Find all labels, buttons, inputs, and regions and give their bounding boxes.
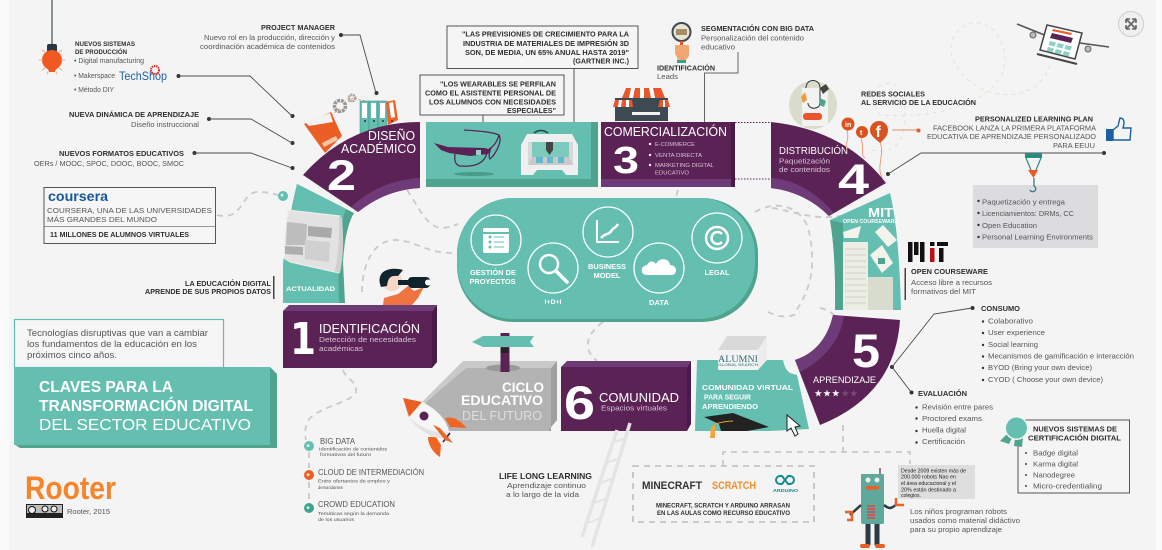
sector 6: comunidad <box>561 361 691 431</box>
sector 3: comercialización: COMERCIALIZACIÓN <box>604 124 727 139</box>
list: consumo: User experience <box>988 328 1045 337</box>
cloud item <box>304 467 424 491</box>
list: consumo: BYOD (Bring your own device) <box>988 363 1093 372</box>
logo: MIT <box>908 242 948 262</box>
sector 6: comunidad: COMUNIDAD <box>599 390 679 405</box>
text block: life long learning <box>499 471 592 499</box>
panel: coursera: 11 MILLONES DE ALUMNOS VIRTUALES <box>50 230 189 239</box>
panel: games in classrooms: MINECRAFT, SCRATCH Y ARDUINO ARRASAN <box>656 504 790 510</box>
text block: redes sociales: REDES SOCIALES <box>861 92 925 98</box>
panel: ciclo educativo del futuro: DEL FUTURO <box>462 408 542 423</box>
sector 5: aprendizaje: 5 <box>852 324 880 377</box>
panel: paquetización list: Licenciamientos: DRMs, CC <box>982 209 1075 218</box>
list: evaluación <box>915 389 993 446</box>
icon: paper stack <box>843 225 897 310</box>
sector 6: comunidad: 6 <box>564 376 595 429</box>
callout: wearables: COMO EL ASISTENTE PERSONAL DE <box>425 90 556 98</box>
icon: magnifier and hand <box>672 23 690 63</box>
connectors: quotes to panel <box>483 68 574 122</box>
icon: gestión de proyectos <box>470 215 521 286</box>
central panel: capabilities <box>457 198 758 322</box>
button: expand <box>1118 12 1144 36</box>
panel: comunidad virtual <box>695 360 809 438</box>
text block: segmentación con big data: educativo <box>701 42 735 52</box>
dashed link: coursera to actualidad <box>217 191 288 216</box>
icon: thumbs up <box>1106 118 1131 141</box>
text block: nuevos sistemas de producción: • Método DIY <box>74 87 114 94</box>
sector 1: identificación <box>283 305 437 368</box>
callout: previsiones de crecimiento: SON, DE MEDIA, UN 65% ANUAL HASTA 2019" <box>465 50 629 57</box>
sector 2: diseño académico <box>303 122 420 212</box>
callout: previsiones de crecimiento <box>447 26 638 68</box>
panel: MIT open courseware: MIT <box>868 205 893 220</box>
text block: open courseware: Acceso libre a recursos <box>911 278 992 287</box>
text block: identificación leads: IDENTIFICACIÓN <box>657 64 715 72</box>
list: evaluación: EVALUACIÓN <box>918 389 967 398</box>
text box: introducción: Tecnologías disruptivas que van a cambiar <box>27 328 208 339</box>
icon: ladder <box>582 423 630 547</box>
text block: segmentación con big data: Personalización del contenido <box>701 34 804 42</box>
panel: ciclo educativo del futuro: CICLO <box>502 380 544 395</box>
icon: legal copyright: LEGAL <box>704 270 730 277</box>
connectors: aprendizaje <box>890 306 974 394</box>
sector 1: identificación: Detección de necesidades <box>319 335 416 344</box>
text block: project manager <box>200 23 336 51</box>
logo: TechShop: TechShop <box>119 69 167 83</box>
sector 4: distribución: Paquetización <box>779 156 830 166</box>
icon: I+D+I <box>528 243 578 306</box>
connector: nuevos sistemas <box>176 74 294 118</box>
text block: nuevos formatos educativos <box>34 149 185 168</box>
panel: MIT open courseware <box>830 193 901 310</box>
connector: personalized learning plan <box>886 151 1106 176</box>
cloud item: * <box>306 472 310 481</box>
panel: certificación digital: Karma digital <box>1033 460 1078 468</box>
connector: redes sociales <box>892 128 920 132</box>
panel: certificación digital: CERTIFICACIÓN DIGITAL <box>1028 434 1121 442</box>
connector: nuevos formatos <box>192 151 294 170</box>
text block: nueva dinámica de aprendizaje <box>69 110 199 129</box>
logo: Rooter: Rooter <box>25 470 116 506</box>
sector 4: distribución: 4 <box>838 156 869 204</box>
icon: badge <box>1000 416 1028 447</box>
panel: paquetización list: Personal Learning Environments <box>982 232 1093 242</box>
text box: introducción: los fundamentos de la educación en los <box>27 339 197 350</box>
icon: crane hook <box>1025 153 1042 192</box>
panel: coursera: coursera <box>48 188 108 204</box>
panel: games in classrooms <box>633 466 814 522</box>
list: evaluación: Revisión entre pares <box>922 402 993 412</box>
cloud item: Entre ofertantes de empleo y <box>318 478 391 484</box>
text block: educación digital: LA EDUCACIÓN DIGITAL <box>185 279 272 288</box>
crowd item: Temáticas según la demanda <box>318 511 389 517</box>
note: robots Nao <box>898 465 975 499</box>
icon: store <box>613 88 670 121</box>
icon: data cloud <box>634 243 684 307</box>
text block: open courseware <box>904 268 992 300</box>
sector 1: identificación: IDENTIFICACIÓN <box>319 321 420 336</box>
sector 2: diseño académico: DISEÑO <box>368 128 415 143</box>
sector 1: identificación: 1 <box>290 314 316 365</box>
callout: previsiones de crecimiento: INDUSTRIA DE MATERIALES DE IMPRESIÓN 3D <box>463 39 629 48</box>
panel: certificación digital: Badge digital <box>1033 448 1078 458</box>
title <box>14 367 277 448</box>
sector 1: identificación: académicas <box>319 344 363 353</box>
text block: robots caption: usados como material didáctivo <box>910 516 1020 525</box>
panel: comunidad virtual: PARA SEGUIR <box>704 392 752 402</box>
list: future trends <box>304 436 424 523</box>
callout: previsiones de crecimiento: (GARTNER INC.) <box>573 58 629 66</box>
cloud item: demandantes <box>318 485 344 491</box>
panel: coursera <box>44 188 216 244</box>
list: consumo: CYOD ( Choose your own device) <box>988 375 1104 384</box>
icon: graduation cap <box>704 413 769 438</box>
text box: introducción: próximos cinco años. <box>27 350 117 361</box>
text block: segmentación con big data: SEGMENTACIÓN CON BIG DATA <box>701 24 815 33</box>
panel: certificación digital: Micro-credentialing <box>1033 482 1102 490</box>
icon: signpost <box>472 333 534 372</box>
sector 3: comercialización: EDUCATIVO <box>655 170 690 176</box>
sector 4: distribución <box>771 122 886 216</box>
text block: segmentación con big data <box>701 24 815 52</box>
text block: personalized learning plan: PARA EEUU <box>1053 143 1095 150</box>
logo: Rooter <box>25 470 116 518</box>
text block: nuevos sistemas de producción: • Digital manufacturing <box>74 58 144 65</box>
text block: educación digital <box>145 276 274 299</box>
text block: nuevos sistemas de producción: NUEVOS SISTEMAS <box>75 41 136 48</box>
panel: coursera: COURSERA, UNA DE LAS UNIVERSIDADES <box>47 206 212 215</box>
sector 6: comunidad: Espacios virtuales <box>601 404 667 412</box>
icon: social balloons: in <box>845 122 851 129</box>
dashed link: coursera to actualidad: * <box>280 192 284 202</box>
big data item: BIG DATA <box>320 436 355 446</box>
text block: personalized learning plan: EDUCATIVA DE APRENDIZAJE PERSONALIZADO <box>927 134 1097 141</box>
title: CLAVES PARA LA <box>39 379 173 396</box>
panel: games in classrooms: ARDUINO <box>773 488 799 493</box>
text block: project manager: Nuevo rol en la producción, dirección y <box>204 33 335 42</box>
text block: project manager: PROJECT MANAGER <box>261 23 336 32</box>
panel: certificación digital: Nanodegree <box>1033 470 1075 480</box>
big data item: formativos del futuro <box>320 452 371 458</box>
text block: nuevos sistemas de producción: • Makerspace <box>74 73 115 80</box>
text block: life long learning: LIFE LONG LEARNING <box>499 471 592 481</box>
sector 4: distribución: de contenidos <box>779 165 830 174</box>
icon: gestión de proyectos: PROYECTOS <box>470 279 516 286</box>
panel: certificación digital <box>1000 416 1130 493</box>
icon: data cloud: DATA <box>649 300 669 307</box>
note: robots Nao: el área educacional y el <box>901 481 956 487</box>
text block: nuevos sistemas de producción: DE PRODUCCIÓN <box>75 47 127 56</box>
icon: shopping bag <box>789 80 837 129</box>
panel: comunidad virtual: APRENDIENDO <box>702 402 758 411</box>
title: TRANSFORMACIÓN DIGITAL <box>39 397 253 415</box>
sector 3: comercialización <box>601 122 735 187</box>
icon: 3D printer <box>521 130 578 175</box>
panel: actualidad: ACTUALIDAD <box>286 286 335 293</box>
dashed path: identificación to trends <box>305 370 356 440</box>
text block: nuevos sistemas de producción <box>74 41 144 94</box>
logo: alumni box <box>718 336 767 370</box>
logo: Rooter: Rooter, 2015 <box>67 509 110 516</box>
callout: wearables: "LOS WEARABLES SE PERFILAN <box>440 82 556 88</box>
text block: nuevos formatos educativos: NUEVOS FORMATOS EDUCATIVOS <box>59 149 184 158</box>
text block: identificación leads <box>657 64 715 81</box>
icon: gestión de proyectos: GESTIÓN DE <box>470 268 516 277</box>
icon: newspaper <box>284 210 343 273</box>
list: evaluación: Certificación <box>922 437 965 446</box>
text block: robots caption: para su propio aprendizaje <box>910 525 1002 534</box>
connector: project manager <box>339 33 378 95</box>
panel: MIT open courseware: OPEN COURSEWARE <box>843 219 899 225</box>
icon: cursor <box>787 415 800 436</box>
note: robots Nao: Desde 2009 existen más de <box>901 468 966 474</box>
text box: introducción <box>14 320 224 368</box>
sector 4: distribución: DISTRIBUCIÓN <box>779 144 848 157</box>
panel: comunidad virtual: COMUNIDAD VIRTUAL <box>702 383 793 392</box>
crowd item: de los usuarios <box>318 517 355 523</box>
icon: smart glasses <box>434 130 500 176</box>
panel: certificación digital: NUEVOS SISTEMAS DE <box>1033 424 1117 434</box>
note: robots Nao: 20% están destinado a <box>901 488 956 494</box>
list: evaluación: Proctored exams <box>922 414 982 423</box>
list: consumo: Social learning <box>988 340 1038 349</box>
text block: life long learning: a lo largo de la vida <box>506 490 580 499</box>
text block: open courseware: formativos del MIT <box>911 287 976 296</box>
big data item: Identificación de contenidos <box>319 446 388 452</box>
sector 3: comercialización: VENTA DIRECTA <box>655 153 702 159</box>
cloud item: CLOUD DE INTERMEDIACIÓN <box>318 467 424 477</box>
sector 5: aprendizaje: ★★ <box>841 388 858 400</box>
text block: educación digital: APRENDE DE SUS PROPIOS DATOS <box>145 289 271 296</box>
icon: business model: MODEL <box>594 273 621 280</box>
panel: coursera: MÁS GRANDES DEL MUNDO <box>47 215 157 224</box>
connector: segmentación <box>704 52 738 122</box>
text block: personalized learning plan <box>927 116 1097 150</box>
sector 2: diseño académico: ACADÉMICO <box>341 141 416 156</box>
panel: paquetización list: Open Education <box>982 221 1037 230</box>
sector 3: comercialización: MARKETING DIGITAL <box>655 163 714 169</box>
sector 2: diseño académico: 2 <box>327 152 356 200</box>
big data item <box>304 436 388 458</box>
icon: social balloons: t <box>860 130 863 137</box>
note: robots Nao: colegios. <box>901 493 921 499</box>
icon: business model <box>583 207 633 280</box>
logo: alumni box: GLOBAL SEARCH <box>718 363 759 367</box>
text block: nueva dinámica de aprendizaje: NUEVA DINÁMICA DE APRENDIZAJE <box>69 110 199 119</box>
panel: games in classrooms: SCRATCH <box>712 480 756 492</box>
list: consumo: CONSUMO <box>981 304 1020 313</box>
text block: robots caption: Los niños programan robots <box>910 507 1007 516</box>
icon: rocket <box>403 398 466 457</box>
crowd item: CROWD EDUCATION <box>318 499 395 509</box>
icon: light bulb <box>39 0 65 74</box>
text block: personalized learning plan: FACEBOOK LANZA LA PRIMERA PLATAFORMA <box>933 126 1096 132</box>
panel: games in classrooms: EN LAS AULAS COMO RECURSO EDUCATIVO <box>657 511 790 517</box>
list: evaluación: Huella digital <box>922 426 966 434</box>
text block: robots caption <box>910 507 1020 534</box>
text block: nuevos formatos educativos: OERs / MOOC, SPOC, DOOC, BOOC, SMOC <box>34 159 185 168</box>
text block: redes sociales <box>861 92 976 107</box>
icon: business model: BUSINESS <box>588 264 626 271</box>
title: DEL SECTOR EDUCATIVO <box>39 417 251 434</box>
callout: wearables: LOS ALUMNOS CON NECESIDADES <box>429 100 556 106</box>
sector 3: comercialización: 3 <box>613 140 639 182</box>
big data item: * <box>306 443 310 452</box>
panel: games in classrooms: MINECRAFT <box>642 480 702 492</box>
text block: open courseware: OPEN COURSEWARE <box>911 269 988 276</box>
panel: ciclo educativo del futuro <box>422 361 557 431</box>
callout: previsiones de crecimiento: "LAS PREVISIONES DE CRECIMIENTO PARA LA <box>462 32 629 38</box>
list: consumo <box>981 304 1134 384</box>
panel: ciclo educativo del futuro: EDUCATIVO <box>461 393 543 408</box>
text block: personalized learning plan: PERSONALIZED LEARNING PLAN <box>975 116 1093 124</box>
panel: wearables and 3D printing <box>426 122 598 187</box>
crowd item: * <box>306 505 310 514</box>
text block: nueva dinámica de aprendizaje: Diseño instruccional <box>131 120 199 129</box>
crowd item <box>304 499 395 523</box>
text block: life long learning: Aprendizaje continuo <box>507 481 586 490</box>
icon: binders, book and gears <box>304 95 398 153</box>
panel: paquetización list: Paquetización y entrega <box>982 198 1066 206</box>
sector 5: aprendizaje <box>795 315 900 425</box>
icon: social balloons <box>842 118 888 178</box>
list: consumo: Mecanismos de gamificación e interacción <box>988 352 1134 360</box>
icon: person with binoculars <box>380 269 431 305</box>
icon: legal copyright <box>692 213 742 277</box>
icon: I+D+I: I+D+I <box>544 299 562 306</box>
list: consumo: Colaborativo <box>988 316 1033 326</box>
text block: redes sociales: AL SERVICIO DE LA EDUCACIÓN <box>861 98 976 107</box>
logo: alumni box: ALUMNI <box>718 354 758 364</box>
panel: paquetización list <box>973 185 1098 248</box>
note: robots Nao: 200.000 robots Nao en <box>901 474 956 480</box>
callout: wearables <box>420 75 564 115</box>
sector 5: aprendizaje: ★★★ <box>814 388 840 400</box>
text block: project manager: coordinación académica de contenidos <box>200 42 335 51</box>
callout: wearables: ESPECIALES" <box>507 108 556 115</box>
sector 5: aprendizaje: APRENDIZAJE <box>813 375 876 385</box>
icon: social balloons: f <box>876 124 882 141</box>
sector 3: comercialización: E-COMMERCE <box>655 142 695 148</box>
text block: identificación leads: Leads <box>657 72 678 81</box>
panel: actualidad <box>283 184 354 303</box>
connector: nueva dinámica <box>207 117 294 145</box>
icon: flying laptop <box>1017 24 1109 64</box>
icon: robot <box>845 468 904 548</box>
